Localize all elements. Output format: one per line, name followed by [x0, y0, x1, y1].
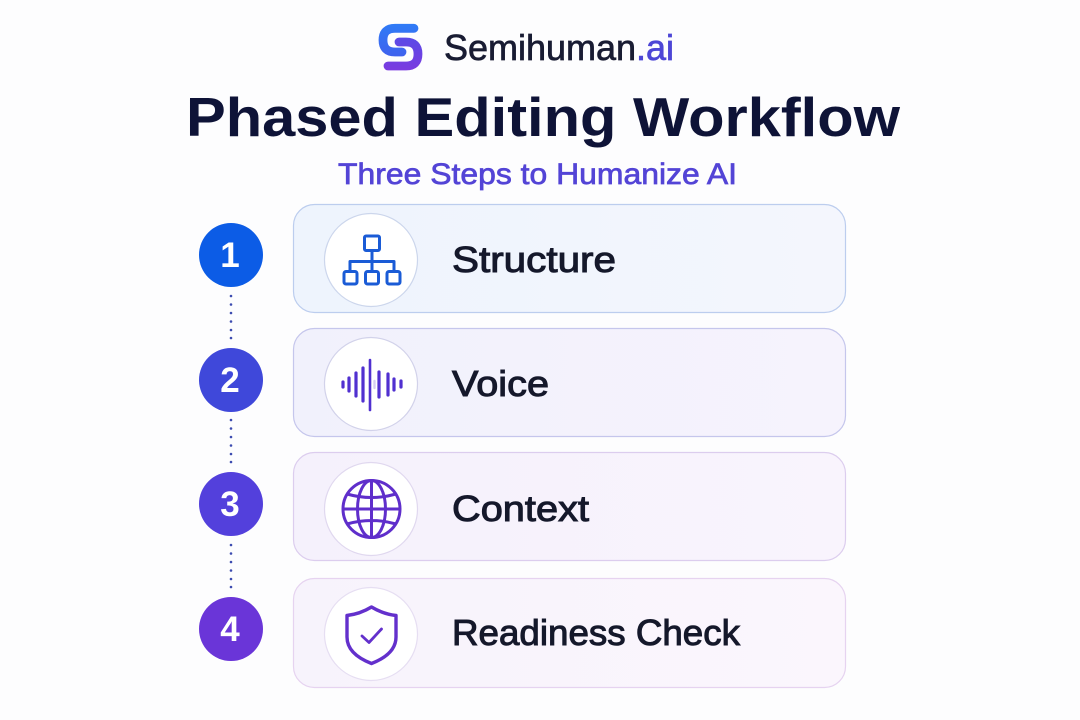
brand name: Semihuman.ai — [444, 27, 674, 68]
panel: Structure — [294, 204, 846, 312]
number badge 2: 2 — [220, 361, 240, 400]
step 4: Readiness Check — [199, 578, 846, 688]
label: Context: Context — [452, 488, 589, 529]
number badge 3: 3 — [220, 485, 240, 524]
subtitle: Three Steps to Humanize AI — [338, 158, 737, 191]
number badge 4 — [199, 597, 263, 661]
logo — [383, 27, 674, 68]
number badge 2 — [199, 348, 263, 412]
icon circle: shield check — [324, 588, 418, 680]
step 3: Context — [199, 452, 846, 560]
label: Readiness Check: Readiness Check — [452, 612, 741, 653]
panel: Voice — [294, 328, 846, 436]
icon circle: hierarchy — [324, 214, 418, 306]
step 2: Voice — [199, 328, 846, 436]
number badge 1 — [199, 223, 263, 287]
title: Phased Editing Workflow — [186, 86, 900, 148]
number badge 3 — [199, 472, 263, 536]
panel: Readiness Check — [294, 578, 846, 688]
step 1: Structure — [199, 204, 846, 312]
number badge 4: 4 — [220, 610, 240, 649]
label: Structure: Structure — [452, 239, 616, 280]
label: Voice: Voice — [452, 363, 549, 404]
panel: Context — [294, 452, 846, 560]
number badge 1: 1 — [220, 236, 240, 275]
icon circle: globe — [324, 462, 418, 556]
icon: S logo mark — [383, 28, 418, 66]
timeline connectors — [230, 295, 232, 588]
icon circle: waveform — [324, 338, 418, 430]
